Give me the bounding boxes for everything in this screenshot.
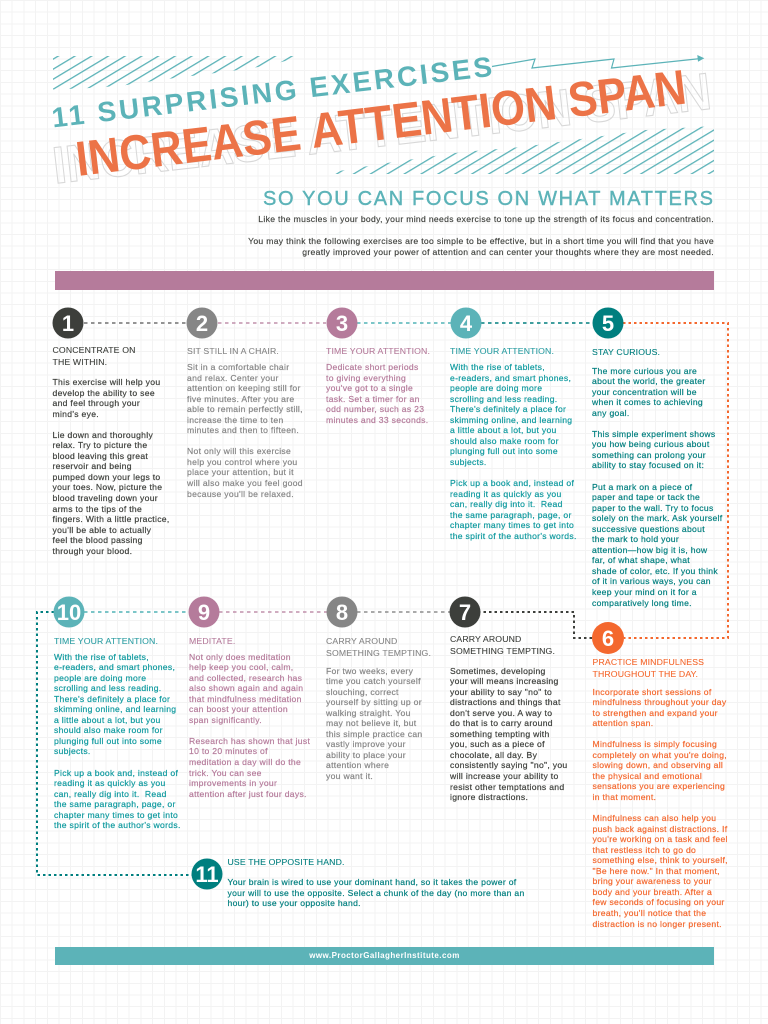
- heading: step 11: USE THE OPPOSITE HAND.: [228, 857, 345, 867]
- panel: step 1: [52, 345, 170, 556]
- step badge 9: 9: [198, 600, 210, 625]
- step badge 8: [326, 596, 358, 628]
- panel: step 10: [54, 636, 181, 830]
- body: step 6: Incorporate short sessions of mindfulness throughout your day to strengthen and expand your attention span. Mindfulness is simply focusing completely on what you're doing, slowing down, and observing all the physical and emotional sensations you are experiencing in that moment. Mindfulness can also help you push back against distractions. If you're working on a task and feel that restless itch to go do something else, think to yourself, "Be here now." In that moment, bring your awareness to your body and your breath. After a few seconds of focusing on your breath, you'll notice that the distraction is no longer present.: [592, 686, 728, 929]
- panel: step 5: [592, 347, 722, 608]
- panel: step 3: [326, 346, 430, 425]
- title line: 11 surprising exercises: 11 SURPRISING EXERCISES: [50, 51, 494, 133]
- step badge 6: 6: [602, 626, 614, 651]
- step badge 2: [186, 308, 218, 338]
- body: step 4: With the rise of tablets, e-readers, and smart phones, people are doing more scrolling and less reading. There's definitely a place for skimming online, and learning a little about a lot, but you should also make room for plunging full out into some subjects. Pick up a book and, instead of reading it as quickly as you can, really dig into it. Read the same paragraph, page, or chapter many times to get into the spirit of the author's words.: [450, 362, 577, 541]
- hatch decoration: top left: [53, 56, 303, 90]
- connector: 1 to 2: [84, 322, 187, 324]
- heading: step 4: TIME YOUR ATTENTION.: [450, 346, 554, 356]
- step badge 4: [450, 308, 482, 338]
- body: step 7: Sometimes, developing your will means increasing your ability to say "no" to distractions and things that don't serve you. A way to do that is to carry around something tempting with you, such as a piece of chocolate, all day. By consistently saying "no", you will increase your ability to resist other temptations and ignore distractions.: [450, 666, 568, 802]
- step badge 4: 4: [460, 311, 473, 336]
- heading: step 1: CONCENTRATE ON THE WITHIN.: [52, 345, 136, 367]
- connector: 7 to 8: [357, 611, 450, 613]
- panel: step 6: [592, 657, 728, 929]
- connector: 9 to 10: [84, 611, 189, 613]
- step badge 2: 2: [196, 311, 208, 336]
- panel: step 9: [189, 636, 310, 799]
- heading: step 8: CARRY AROUND SOMETHING TEMPTING.: [326, 636, 431, 658]
- pink banner: [55, 271, 714, 290]
- connector: 3 to 4: [357, 322, 451, 324]
- body: step 1: This exercise will help you develop the ability to see and feel through your mind's eye. Lie down and thoroughly relax. Try to picture the blood leaving this great reservoir and being pumped down your legs to your toes. Now, picture the blood traveling down your arms to the tips of the fingers. With a little practice, you'll be able to actually feel the blood passing through your blood.: [52, 377, 170, 556]
- step badge 7: 7: [459, 600, 471, 625]
- footer banner with website: www.ProctorGallagherInstitute.com: [309, 951, 460, 960]
- subtitle: SO YOU CAN FOCUS ON WHAT MATTERS: [263, 188, 713, 210]
- step badge 6: [592, 622, 624, 654]
- intro paragraph 1: Like the muscles in your body, your mind needs exercise to tone up the strength of its focus and concentration.: [258, 214, 714, 224]
- panel: step 7: [450, 634, 568, 802]
- panel: step 8: [326, 636, 431, 781]
- step badge 3: [326, 308, 358, 338]
- intro paragraph 2: You may think the following exercises are too simple to be effective, but in a short time you will find that you have greatly improved your power of attention and can center your thoughts where they are most needed.: [248, 236, 714, 257]
- step badge 1: [52, 308, 84, 338]
- connector: 4 to 5: [481, 322, 593, 324]
- title ghost outline: INCREASE ATTENTION SPAN: [50, 63, 714, 195]
- step badge 5: [592, 308, 624, 338]
- step badge 8: 8: [336, 600, 348, 625]
- heading: step 9: MEDITATE.: [189, 636, 235, 646]
- body: step 8: For two weeks, every time you catch yourself slouching, correct yourself by sitting up or walking straight. You may not believe it, but this simple practice can vastly improve your ability to place your attention where you want it.: [326, 666, 423, 781]
- footer banner with website: [55, 947, 714, 965]
- connector: 6 to 7: [480, 612, 592, 638]
- title line: increase attention span: INCREASE ATTENTION SPAN: [73, 61, 689, 187]
- panel: step 11: [227, 857, 525, 908]
- body: step 10: With the rise of tablets, e-readers, and smart phones, people are doing more scrolling and less reading. There's definitely a place for skimming online, and learning a little about a lot, but you should also make room for plunging full out into some subjects. Pick up a book and, instead of reading it as quickly as you can, really dig into it. Read the same paragraph, page, or chapter many times to get into the spirit of the author's words.: [54, 652, 181, 830]
- step badge 3: 3: [336, 311, 348, 336]
- zigzag arrow: [492, 56, 703, 68]
- connector: 2 to 3: [218, 322, 326, 324]
- heading: step 6: PRACTICE MINDFULNESS THROUGHOUT THE DAY.: [592, 657, 704, 679]
- heading: step 10: TIME YOUR ATTENTION.: [54, 636, 158, 646]
- body: step 9: Not only does meditation help keep you cool, calm, and collected, research has also shown again and again that mindfulness meditation can boost your attention span significantly. Research has shown that just 10 to 20 minutes of meditation a day will do the trick. You can see improvements in your attention after just four days.: [189, 652, 310, 799]
- connector: 10 to 11: [37, 612, 192, 875]
- body: step 2: Sit in a comfortable chair and relax. Center your attention on keeping still for five minutes. After you are able to remain perfectly still, increase the time to ten minutes and then to fifteen. Not only will this exercise help you control where you place your attention, but it will also make you feel good because you'll be relaxed.: [187, 362, 303, 499]
- hatch decoration: bottom right: [322, 126, 714, 174]
- step badge 11: 11: [195, 862, 219, 887]
- body: step 5: The more curious you are about the world, the greater your concentration will be when it comes to achieving any goal. This simple experiment shows you how being curious about something can prolong your ability to stay focused on it: Put a mark on a piece of paper and tape or tack the paper to the wall. Try to focus solely on the mark. Ask yourself successive questions about the mark to hold your attention—how big it is, how far, of what shape, what shade of color, etc. If you think of it in various ways, you can keep your mind on it for a comparatively long time.: [592, 366, 722, 608]
- connector: 8 to 9: [219, 611, 327, 613]
- body: step 11: Your brain is wired to use your dominant hand, so it takes the power of your will to use the opposite. Select a chunk of the day (no more than an hour) to use your opposite hand.: [228, 877, 525, 908]
- connector: 5 to 6: [623, 323, 728, 638]
- body: step 3: Dedicate short periods to giving everything you've got to a single task. Set a timer for an odd number, such as 23 minutes and 33 seconds.: [326, 362, 428, 425]
- step badge 7: [450, 596, 480, 628]
- step badge 9: [188, 596, 220, 628]
- step badge 10: 10: [57, 600, 81, 625]
- step badge 5: 5: [602, 311, 614, 336]
- heading: step 5: STAY CURIOUS.: [592, 347, 660, 357]
- step badge 11: [192, 858, 222, 890]
- heading: step 7: CARRY AROUND SOMETHING TEMPTING.: [450, 634, 555, 656]
- step badge 1: 1: [62, 311, 74, 336]
- heading: step 3: TIME YOUR ATTENTION.: [326, 346, 430, 356]
- heading: step 2: SIT STILL IN A CHAIR.: [187, 346, 279, 356]
- step badge 10: [54, 596, 84, 628]
- panel: step 4: [450, 346, 577, 541]
- panel: step 2: [186, 346, 303, 499]
